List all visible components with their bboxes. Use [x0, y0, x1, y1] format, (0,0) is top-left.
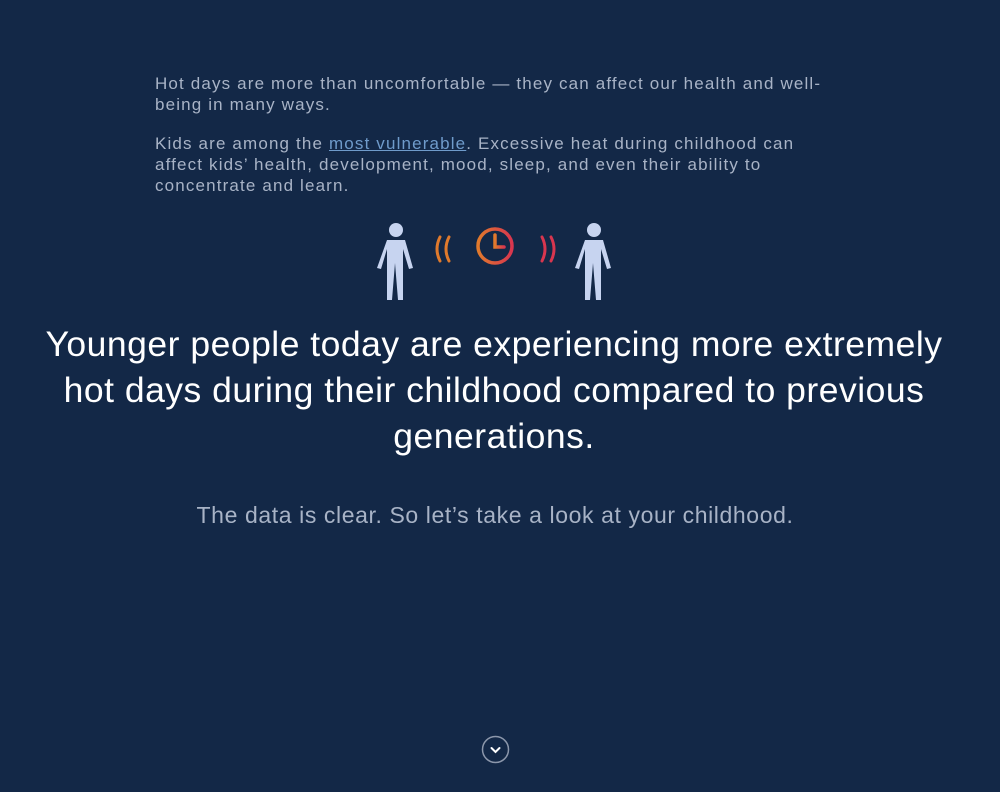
icon: person right [575, 223, 611, 300]
headline [46, 324, 942, 456]
subline: The data is clear. So let’s take a look at your childhood. [197, 502, 793, 528]
intro paragraph 1 [155, 74, 821, 114]
headline: Younger people today are experiencing more extremely [46, 324, 942, 364]
intro paragraph 1: Hot days are more than uncomfortable — they can affect our health and well- [155, 74, 821, 93]
headline: hot days during their childhood compared to previous [64, 370, 924, 410]
icon: scroll down [482, 736, 510, 764]
icon: waves right [542, 237, 554, 261]
intro paragraph 2: affect kids’ health, development, mood, sleep, and even their ability to [155, 155, 761, 174]
icon: generations and clock [377, 223, 611, 300]
intro paragraph 1: being in many ways. [155, 95, 331, 114]
intro paragraph 2 [155, 134, 794, 195]
icon: person left [377, 223, 413, 300]
headline: generations. [393, 416, 595, 456]
intro paragraph 2: concentrate and learn. [155, 176, 349, 195]
icon: waves left [437, 237, 449, 261]
icon: clock [478, 229, 512, 263]
intro paragraph 2: Kids are among the most vulnerable. Excessive heat during childhood can [155, 134, 794, 153]
